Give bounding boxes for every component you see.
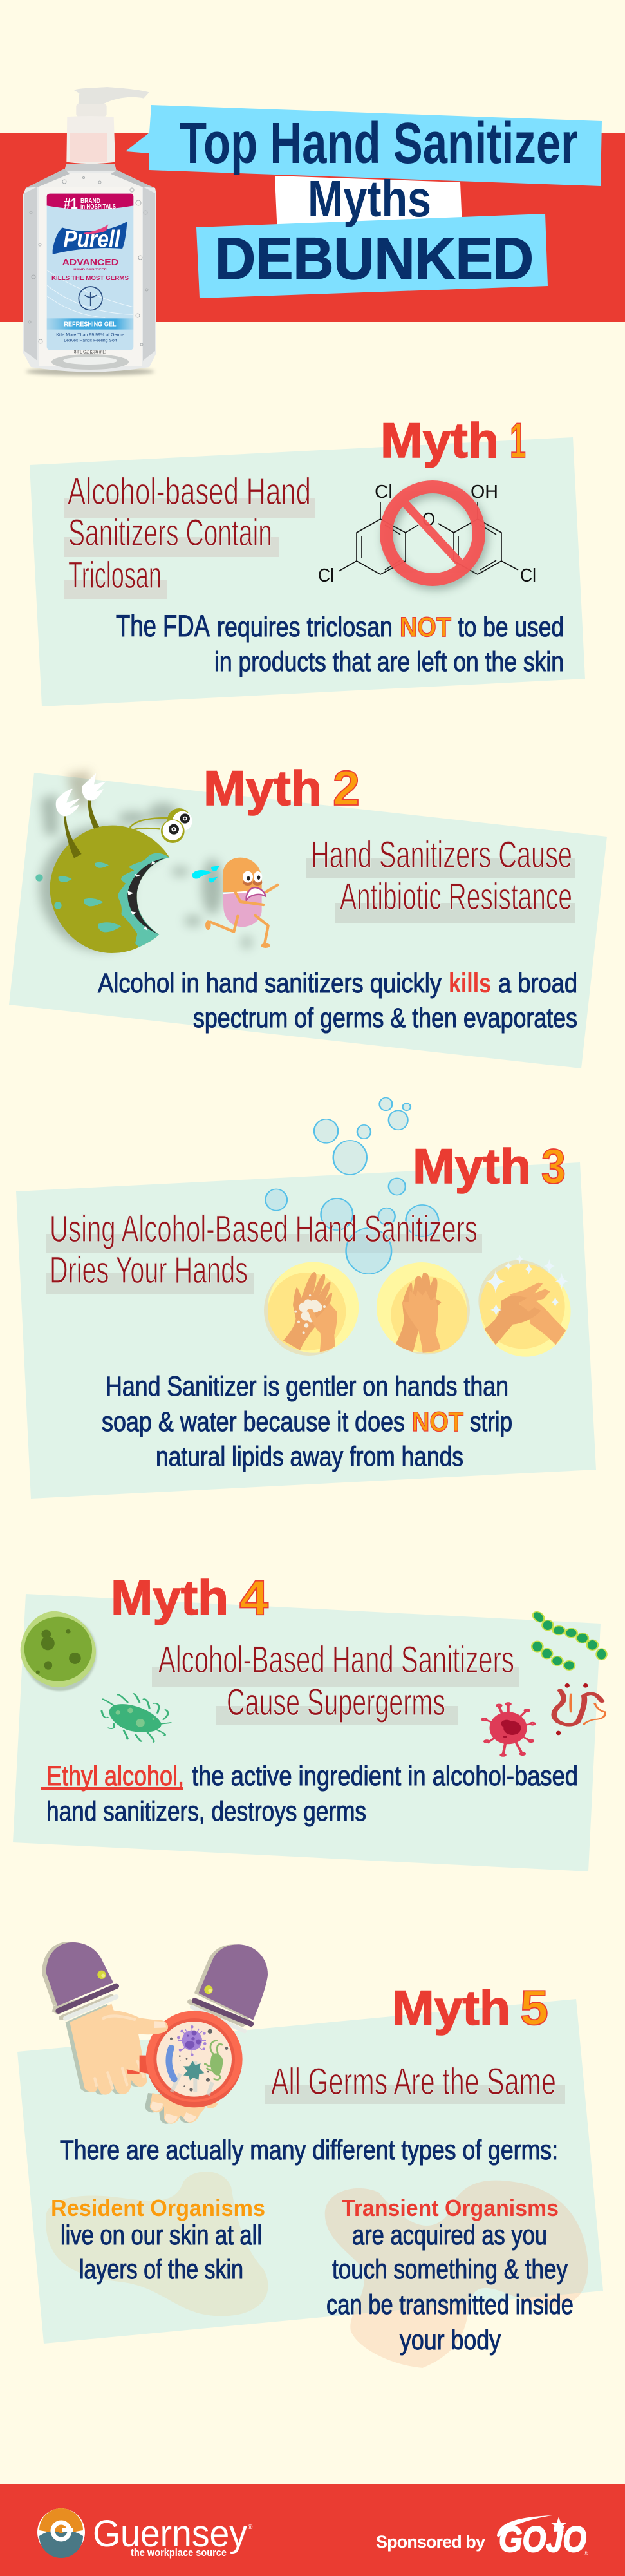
germ: worms: [554, 1683, 605, 1735]
column: transient organisms: touch something & they: [332, 2254, 568, 2285]
step 1: lathering: [264, 1262, 359, 1356]
heading: myth 1 claim: [68, 471, 311, 596]
body text: myth 1: in products that are left on the skin: [214, 647, 564, 677]
myth 2 title: Myth: [203, 761, 322, 816]
icon: triclosan molecule: O: [422, 509, 435, 530]
body text: myth 2: [98, 968, 577, 1034]
myth 1 title: 1: [510, 413, 526, 468]
heading: myth 1 claim: Triclosan: [68, 554, 162, 596]
icon: triclosan molecule: OH: [471, 482, 498, 502]
heading: myth 3 claim: [50, 1208, 478, 1291]
icon: triclosan molecule: [318, 482, 536, 586]
title line 2: Myths: [308, 170, 431, 227]
column: transient organisms: [326, 2195, 574, 2356]
logo: gojo: ®: [584, 2550, 588, 2557]
speech banner: top hand sanitizer: [126, 105, 602, 186]
body text: myth 3: strip: [470, 1406, 512, 1437]
myth 5 title: 5: [520, 1981, 548, 2036]
right sleeve: [190, 1944, 268, 2031]
illustration: soap bubbles: [265, 1098, 438, 1274]
bottle label: [47, 194, 133, 354]
icon: triclosan molecule: Cl: [318, 565, 334, 586]
left hand and sleeve: [42, 1942, 147, 2095]
body text: myth 1: to be used: [458, 612, 564, 643]
icon: purell bottle: [23, 87, 156, 375]
body text: myth 3: [102, 1371, 512, 1472]
panel: myth 4: [13, 1571, 607, 1871]
bottle label: in HOSPITALS: [80, 204, 116, 211]
header band: [0, 133, 625, 322]
bottle label: HAND SANITIZER: [73, 267, 107, 271]
step 2: rubbing: [377, 1262, 470, 1354]
body text: myth 2: Alcohol in hand sanitizers quickly: [98, 968, 442, 999]
bottle label: #1: [64, 195, 78, 213]
bottle label: Leaves Hands Feeling Soft: [64, 339, 117, 343]
myth 3 title: 3: [541, 1139, 566, 1194]
logo: guernsey: ®: [248, 2524, 253, 2531]
heading: myth 4 claim: Cause Supergerms: [227, 1681, 445, 1723]
illustration: germs: [21, 1611, 607, 1756]
banner: debunked: [196, 214, 548, 298]
icon: triclosan molecule: Cl: [375, 482, 393, 502]
body text: myth 3: natural lipids away from hands: [156, 1441, 463, 1472]
panel: myth 2: [9, 761, 607, 1068]
illustration: running pill: [172, 858, 278, 949]
body text: myth 1: The FDA: [116, 609, 210, 643]
panel: myth 5: [17, 1942, 603, 2368]
column: transient organisms: Transient Organisms: [342, 2195, 559, 2221]
bottle label: Purell: [63, 225, 120, 252]
heading highlight bar: [265, 2085, 565, 2104]
title block: [126, 105, 602, 298]
column: transient organisms: your body: [400, 2325, 501, 2356]
panel: myth 1: [30, 413, 585, 706]
illustration: hands holding petri dish: [42, 1942, 268, 2124]
body text: myth 4: hand sanitizers, destroys germs: [46, 1796, 366, 1827]
body text: myth 3: Hand Sanitizer is gentler on hands than: [106, 1371, 508, 1402]
bottle label: ADVANCED: [62, 258, 118, 268]
column: resident organisms: Resident Organisms: [51, 2195, 265, 2221]
heading: myth 2 claim: [311, 834, 572, 918]
myth 2 title: 2: [333, 761, 360, 816]
germ: red virus: [482, 1703, 534, 1756]
germ: green chains: [531, 1611, 607, 1670]
decorative blob: transient organisms: [325, 2181, 588, 2368]
column: resident organisms: layers of the skin: [79, 2254, 243, 2285]
lower hand: [145, 2093, 218, 2124]
myth 4 title: 4: [239, 1571, 268, 1625]
germ: green blob: [21, 1611, 97, 1691]
illustration: hand washing steps: [264, 1255, 571, 1357]
body text: myth 4: [41, 1761, 578, 1827]
footer band: [0, 2484, 625, 2576]
illustration: germ monster: [35, 771, 192, 953]
bottle label: 8 FL OZ (236 mL): [74, 348, 106, 354]
icon: prohibition sign: [386, 487, 481, 583]
icon: triclosan molecule: Cl: [520, 565, 536, 586]
heading highlight bars: [46, 1234, 482, 1294]
heading highlight bars: [64, 498, 315, 599]
bottle label: REFRESHING GEL: [64, 321, 117, 328]
logo: gojo: GOJO: [499, 2519, 586, 2559]
heading: myth 1 claim: Alcohol-based Hand: [68, 471, 311, 513]
step 3: clean hands: [478, 1255, 571, 1357]
decorative blob: resident organisms: [46, 2172, 268, 2316]
myth 5 title: Myth: [392, 1981, 510, 2036]
white banner: myths: [275, 176, 462, 236]
column: resident organisms: [51, 2195, 265, 2285]
myth 1 title: Myth: [380, 413, 499, 468]
heading highlight bars: [152, 1667, 519, 1725]
body text: myth 4: Ethyl alcohol,: [46, 1761, 184, 1792]
heading: myth 4 claim: [158, 1639, 514, 1723]
heading: myth 1 claim: Sanitizers Contain: [68, 512, 272, 554]
heading highlight bars: [306, 858, 575, 923]
column: transient organisms: are acquired as you: [352, 2220, 547, 2251]
column: resident organisms: live on our skin at all: [61, 2220, 262, 2251]
logo: guernsey: the workplace source: [131, 2546, 227, 2559]
body text: myth 2: a broad: [498, 968, 577, 999]
bottle label: Kills More Than 99.99% of Germs: [56, 333, 125, 337]
heading: myth 3 claim: Dries Your Hands: [50, 1249, 248, 1291]
bottle label: KILLS THE MOST GERMS: [51, 275, 129, 282]
body text: myth 3: NOT: [412, 1406, 463, 1437]
panel: myth 3: [16, 1098, 596, 1499]
body text: myth 2: kills: [449, 968, 491, 999]
magnifying dish: [127, 2011, 243, 2107]
myth 3 title: Myth: [413, 1139, 531, 1194]
body text: myth 1: NOT: [400, 612, 451, 643]
bottle label: BRAND: [80, 198, 100, 205]
germ: teal bacterium: [102, 1694, 171, 1742]
body text: myth 3: soap & water because it does: [102, 1406, 405, 1437]
logo: guernsey: Guernsey: [93, 2513, 247, 2555]
title line 3: DEBUNKED: [215, 226, 534, 292]
body text: myth 1: requires triclosan: [217, 612, 393, 643]
logo: guernsey: [37, 2508, 253, 2559]
column: transient organisms: can be transmitted inside: [326, 2289, 574, 2320]
body text: myth 1: [116, 609, 564, 677]
sponsor text: Sponsored by: [376, 2532, 485, 2552]
myth 4 title: Myth: [111, 1571, 229, 1625]
